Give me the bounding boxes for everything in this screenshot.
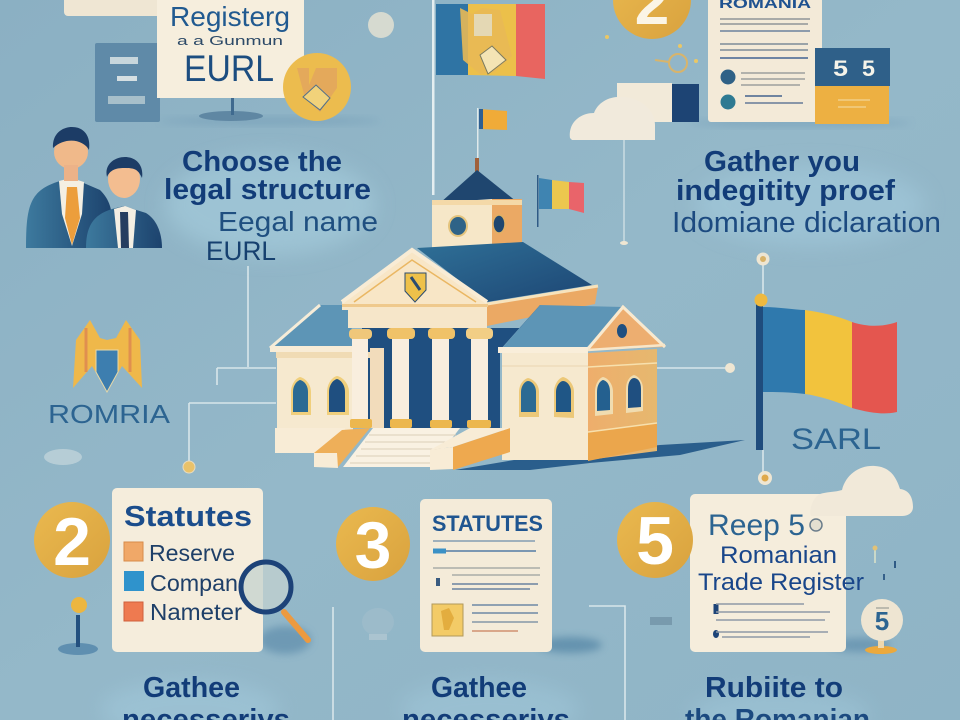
card: [690, 494, 846, 652]
caption: [122, 672, 290, 720]
dark portico interior: [362, 305, 540, 428]
text glow: [695, 165, 925, 245]
image thumbnail: [432, 604, 463, 636]
badge ring: [810, 519, 822, 531]
card: [420, 499, 552, 652]
subtext: legal name EURL: [206, 206, 378, 266]
subtext: legal name EURL: Eegal name: [218, 206, 378, 237]
grey form box: [95, 43, 160, 122]
panel: right flag SARL: [754, 294, 897, 456]
badge: step 2: 2: [53, 504, 91, 580]
heading: gather identity proof: [672, 146, 941, 239]
card title: Statutes: [124, 501, 252, 533]
card title: Trade Register: [698, 569, 864, 596]
left wing: [270, 305, 384, 453]
icon: government building: [270, 158, 745, 470]
checklist: Compan: [150, 570, 238, 596]
small cloud: [44, 449, 82, 465]
icon: large Romanian flag top: [432, 0, 545, 195]
caption: Gathee: [143, 672, 240, 704]
caption: [685, 672, 870, 720]
icon: magnifying glass: [241, 562, 308, 640]
card title: STATUTES: [432, 511, 543, 536]
small marks: [650, 546, 896, 625]
icon: two businessmen: [26, 127, 162, 248]
panel: top-left registration sign: [64, 0, 394, 124]
heading: choose legal structure: Choose the: [182, 146, 342, 178]
cloud and step block: [570, 83, 699, 140]
panel: choose legal structure: [26, 127, 378, 266]
shadow: [259, 626, 311, 654]
icon: golden eagle crest: [73, 320, 142, 392]
heading: choose legal structure: [164, 146, 371, 206]
heading: choose legal structure: legal structure: [164, 174, 371, 206]
heading: gather identity proof: Gather you: [704, 146, 860, 178]
pediment: [342, 250, 488, 328]
card: [112, 488, 263, 652]
score box 5 5: 5: [862, 56, 875, 81]
panel: top-right documents: [570, 0, 941, 245]
card title: Reep 5: [708, 509, 805, 542]
panel: left Romania crest: [44, 320, 171, 465]
label: ROMRIA: ROMRIA: [48, 399, 171, 429]
soft floor shadow: [160, 118, 380, 124]
label: SARL: SARL: [791, 423, 881, 456]
checklist: Reserve: [149, 540, 235, 566]
cream bar: [64, 0, 164, 16]
card lines: [713, 604, 830, 638]
ground shadow: [455, 440, 745, 470]
checklist: Nameter: [150, 599, 242, 625]
text glow: [100, 680, 280, 720]
mic icon: [58, 597, 98, 655]
small emblem blob: [368, 12, 394, 38]
card title: [698, 509, 864, 596]
caption: [402, 672, 570, 720]
heading: gather identity proof: Idomiane diclaration: [672, 207, 941, 239]
sign board: [157, 0, 304, 98]
small icon pin: [861, 599, 903, 654]
caption: Rubiite to: [705, 672, 843, 704]
main roof: [417, 242, 592, 302]
document card: [708, 0, 822, 122]
text glow: [690, 689, 870, 720]
stairs: [314, 428, 510, 470]
badge: step 3: 3: [355, 508, 391, 582]
icon: small tricolor flag: [537, 175, 584, 227]
caption: Gathee: [431, 672, 527, 704]
text glow: [400, 680, 580, 720]
cloud: [810, 466, 913, 516]
score box 5 5: 5: [833, 56, 848, 81]
tower: [432, 158, 522, 255]
card title: Romanian: [720, 542, 837, 569]
right wing: [498, 305, 665, 461]
badge: step 2: [34, 502, 110, 580]
monitor stand: [199, 97, 263, 121]
columns: [349, 328, 493, 428]
sign text: Registerg: [170, 1, 290, 32]
card lines: [433, 541, 540, 631]
badge: step 3: [336, 507, 410, 582]
connector nodes: [183, 241, 772, 485]
badge: step 5: [617, 502, 693, 579]
sign text: EURL: [184, 48, 274, 89]
shadow: [538, 637, 602, 653]
icon: gold crest medal: [283, 53, 351, 121]
badge: step 5: 5: [636, 503, 674, 579]
icon: Romanian flag with pole: [754, 294, 897, 450]
panel: step 2 statutes card: [34, 488, 311, 720]
magnifier sparkle: [605, 35, 698, 72]
connector lines: [189, 140, 763, 720]
subtext: legal name EURL: EURL: [206, 236, 276, 266]
badge: step 2: [613, 0, 691, 39]
small icon pin: 5: [875, 606, 889, 636]
panel: step 3 statutes card: [336, 499, 602, 720]
shadow: [830, 638, 890, 652]
roof eave side: [487, 286, 598, 326]
icon: small orange pennant: [477, 108, 507, 162]
soft floor shadow: [690, 120, 910, 126]
heading: gather identity proof: indegitity proef: [676, 175, 895, 207]
panel: step 5 trade register card: [617, 466, 913, 720]
text glow: [165, 155, 375, 255]
ghost cloud icon: [362, 608, 394, 640]
sign text: [170, 1, 290, 89]
sign text: a a Gunmun: [177, 33, 283, 48]
checklist: [124, 540, 242, 625]
score box 5 5: [815, 48, 890, 124]
